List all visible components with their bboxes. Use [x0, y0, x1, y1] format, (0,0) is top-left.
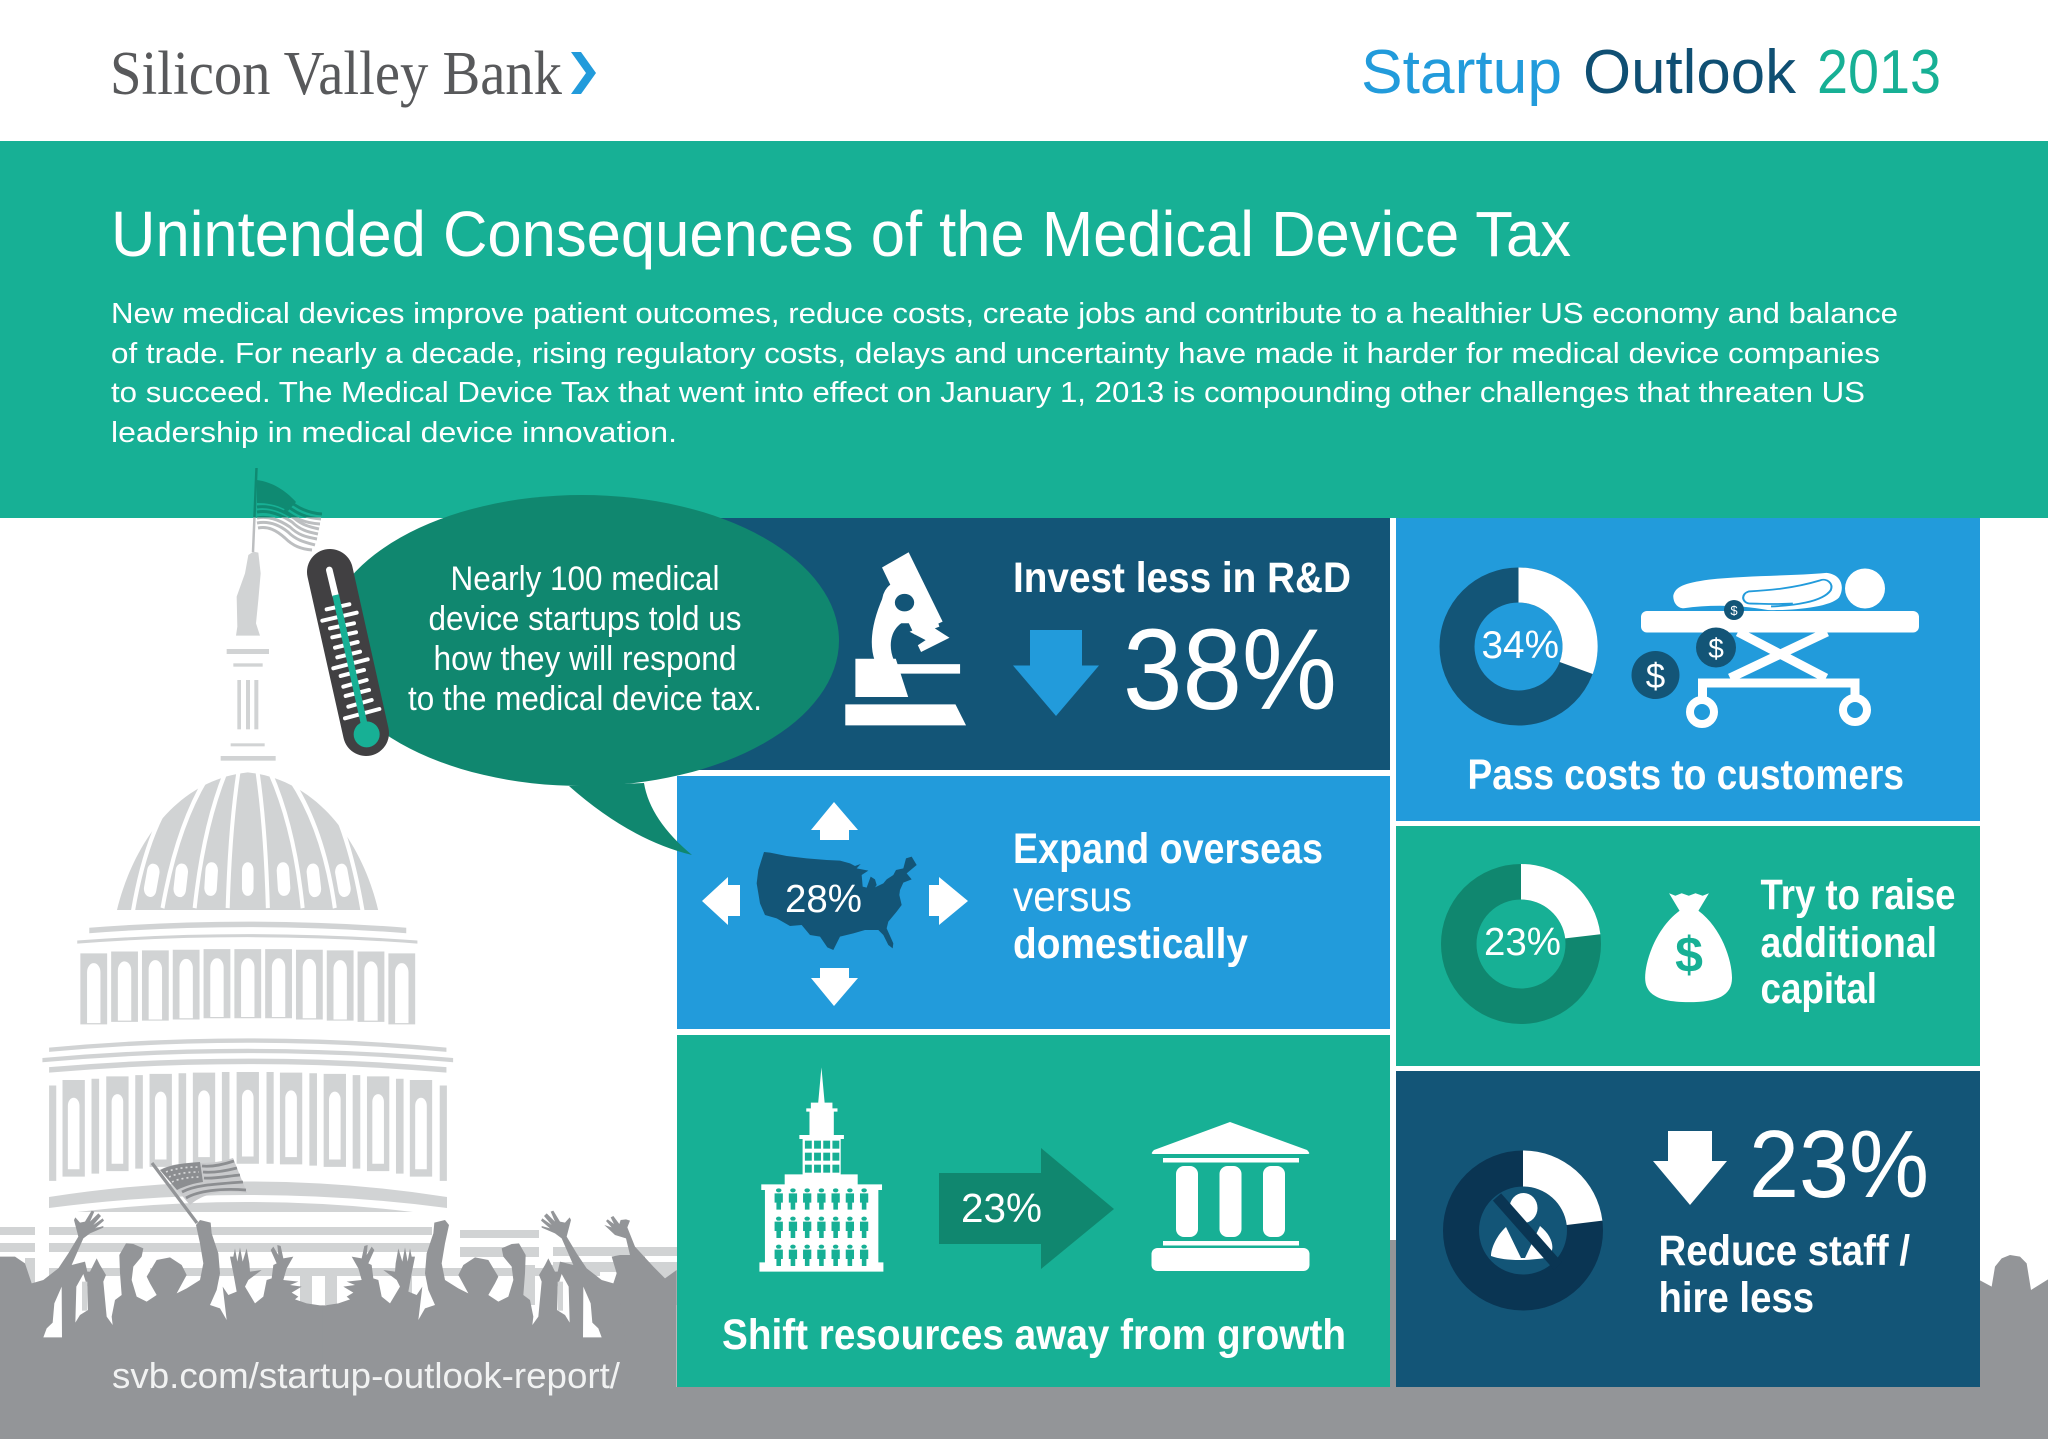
- footer: crowd silhouette: [0, 1211, 2048, 1439]
- icon: bank: [1152, 1122, 1310, 1271]
- label: reduce staff / hire less: hire less: [1658, 1274, 1814, 1322]
- label: invest less in R&D: Invest less in R&D: [1013, 554, 1351, 602]
- arrow: down: [1013, 630, 1099, 716]
- icon: money bag: $: [1675, 927, 1703, 983]
- heading: Startup Outlook 2013: [1361, 38, 1941, 107]
- stat: 28%: 28%: [785, 878, 862, 921]
- label: try to raise additional capital: additional: [1760, 919, 1937, 967]
- callout: speech bubble: [325, 495, 839, 855]
- chart: 23% donut: [1459, 864, 1600, 1006]
- title: Unintended Consequences of the Medical Device Tax: [111, 198, 1571, 270]
- heading: Startup Outlook 2013: Outlook: [1583, 38, 1797, 107]
- intro paragraph: New medical devices improve patient outcomes, reduce costs, create jobs and contribute to a healthier US economy and balance: [111, 298, 1898, 330]
- icon: US map: [757, 852, 917, 950]
- panel: shift resources: [677, 1035, 1390, 1387]
- label: expand overseas versus domestically: Expand overseas: [1013, 825, 1323, 873]
- panel: expand overseas: [677, 776, 1390, 1029]
- label: reduce staff / hire less: [1658, 1227, 1910, 1322]
- icon: microscope: [845, 552, 966, 725]
- icon: money bag: [1645, 893, 1732, 1002]
- intro paragraph: of trade. For nearly a decade, rising regulatory costs, delays and uncertainty have made it harder for medical device companies: [111, 338, 1880, 370]
- label: expand overseas versus domestically: [1013, 825, 1323, 968]
- stat: 23%: 23%: [961, 1185, 1042, 1231]
- icon: patient on stretcher: [1632, 568, 1919, 724]
- panel: pass costs to customers: [1396, 518, 1980, 821]
- arrow: shift: [939, 1148, 1114, 1269]
- illustration: US Capitol building: [0, 552, 677, 1305]
- panel: invest less in R&D: [677, 518, 1390, 770]
- icon: four direction arrows: [702, 802, 968, 1006]
- label: expand overseas versus domestically: domestically: [1013, 920, 1248, 968]
- label: reduce staff / hire less: Reduce staff /: [1658, 1227, 1910, 1275]
- intro paragraph: to succeed. The Medical Device Tax that went into effect on January 1, 2013 is compounding other challenges that threaten US: [111, 377, 1865, 409]
- panel: raise additional capital: [1396, 826, 1980, 1066]
- icon: office building: [759, 1067, 883, 1272]
- stat: 23%: 23%: [1749, 1111, 1929, 1218]
- icon: patient on stretcher: $: [1646, 657, 1665, 696]
- icon: patient on stretcher: $: [1730, 603, 1738, 618]
- icon: patient on stretcher: $: [1708, 633, 1724, 664]
- illustration: flag on Capitol dome: [253, 468, 322, 552]
- chart: donut with crossed-out person: [1461, 1150, 1602, 1292]
- heading: Startup Outlook 2013: Startup: [1361, 38, 1562, 107]
- callout: speech bubble: how they will respond: [434, 640, 736, 678]
- callout: speech bubble: Nearly 100 medical: [450, 560, 720, 598]
- stat: 38%: 38%: [1123, 606, 1337, 734]
- chart: 34% donut: [1457, 567, 1598, 708]
- label: try to raise additional capital: Try to raise: [1760, 871, 1956, 919]
- label: pass costs to customers: Pass costs to customers: [1468, 751, 1904, 799]
- callout: speech bubble: to the medical device tax.: [408, 680, 762, 718]
- footer URL: svb.com/startup-outlook-report/: [112, 1355, 620, 1396]
- chart: 34% donut: 34%: [1482, 624, 1559, 667]
- label: try to raise additional capital: capital: [1760, 965, 1877, 1013]
- intro paragraph: [111, 298, 1898, 449]
- label: expand overseas versus domestically: versus: [1013, 873, 1132, 921]
- panel: reduce staff: [1396, 1071, 1980, 1387]
- label: try to raise additional capital: [1760, 871, 1956, 1013]
- icon: thermometer: [322, 570, 380, 747]
- heading: Startup Outlook 2013: 2013: [1817, 38, 1941, 107]
- intro paragraph: leadership in medical device innovation.: [111, 417, 677, 449]
- label: shift resources away from growth: Shift resources away from growth: [722, 1311, 1346, 1359]
- chart: 23% donut: 23%: [1484, 921, 1561, 964]
- panel: title banner: [0, 141, 2048, 518]
- callout: speech bubble: device startups told us: [428, 600, 742, 638]
- illustration: flag held by crowd: [152, 1158, 247, 1223]
- logo: Silicon Valley Bank: Silicon Valley Bank: [110, 40, 562, 108]
- arrow: down: [1653, 1131, 1727, 1205]
